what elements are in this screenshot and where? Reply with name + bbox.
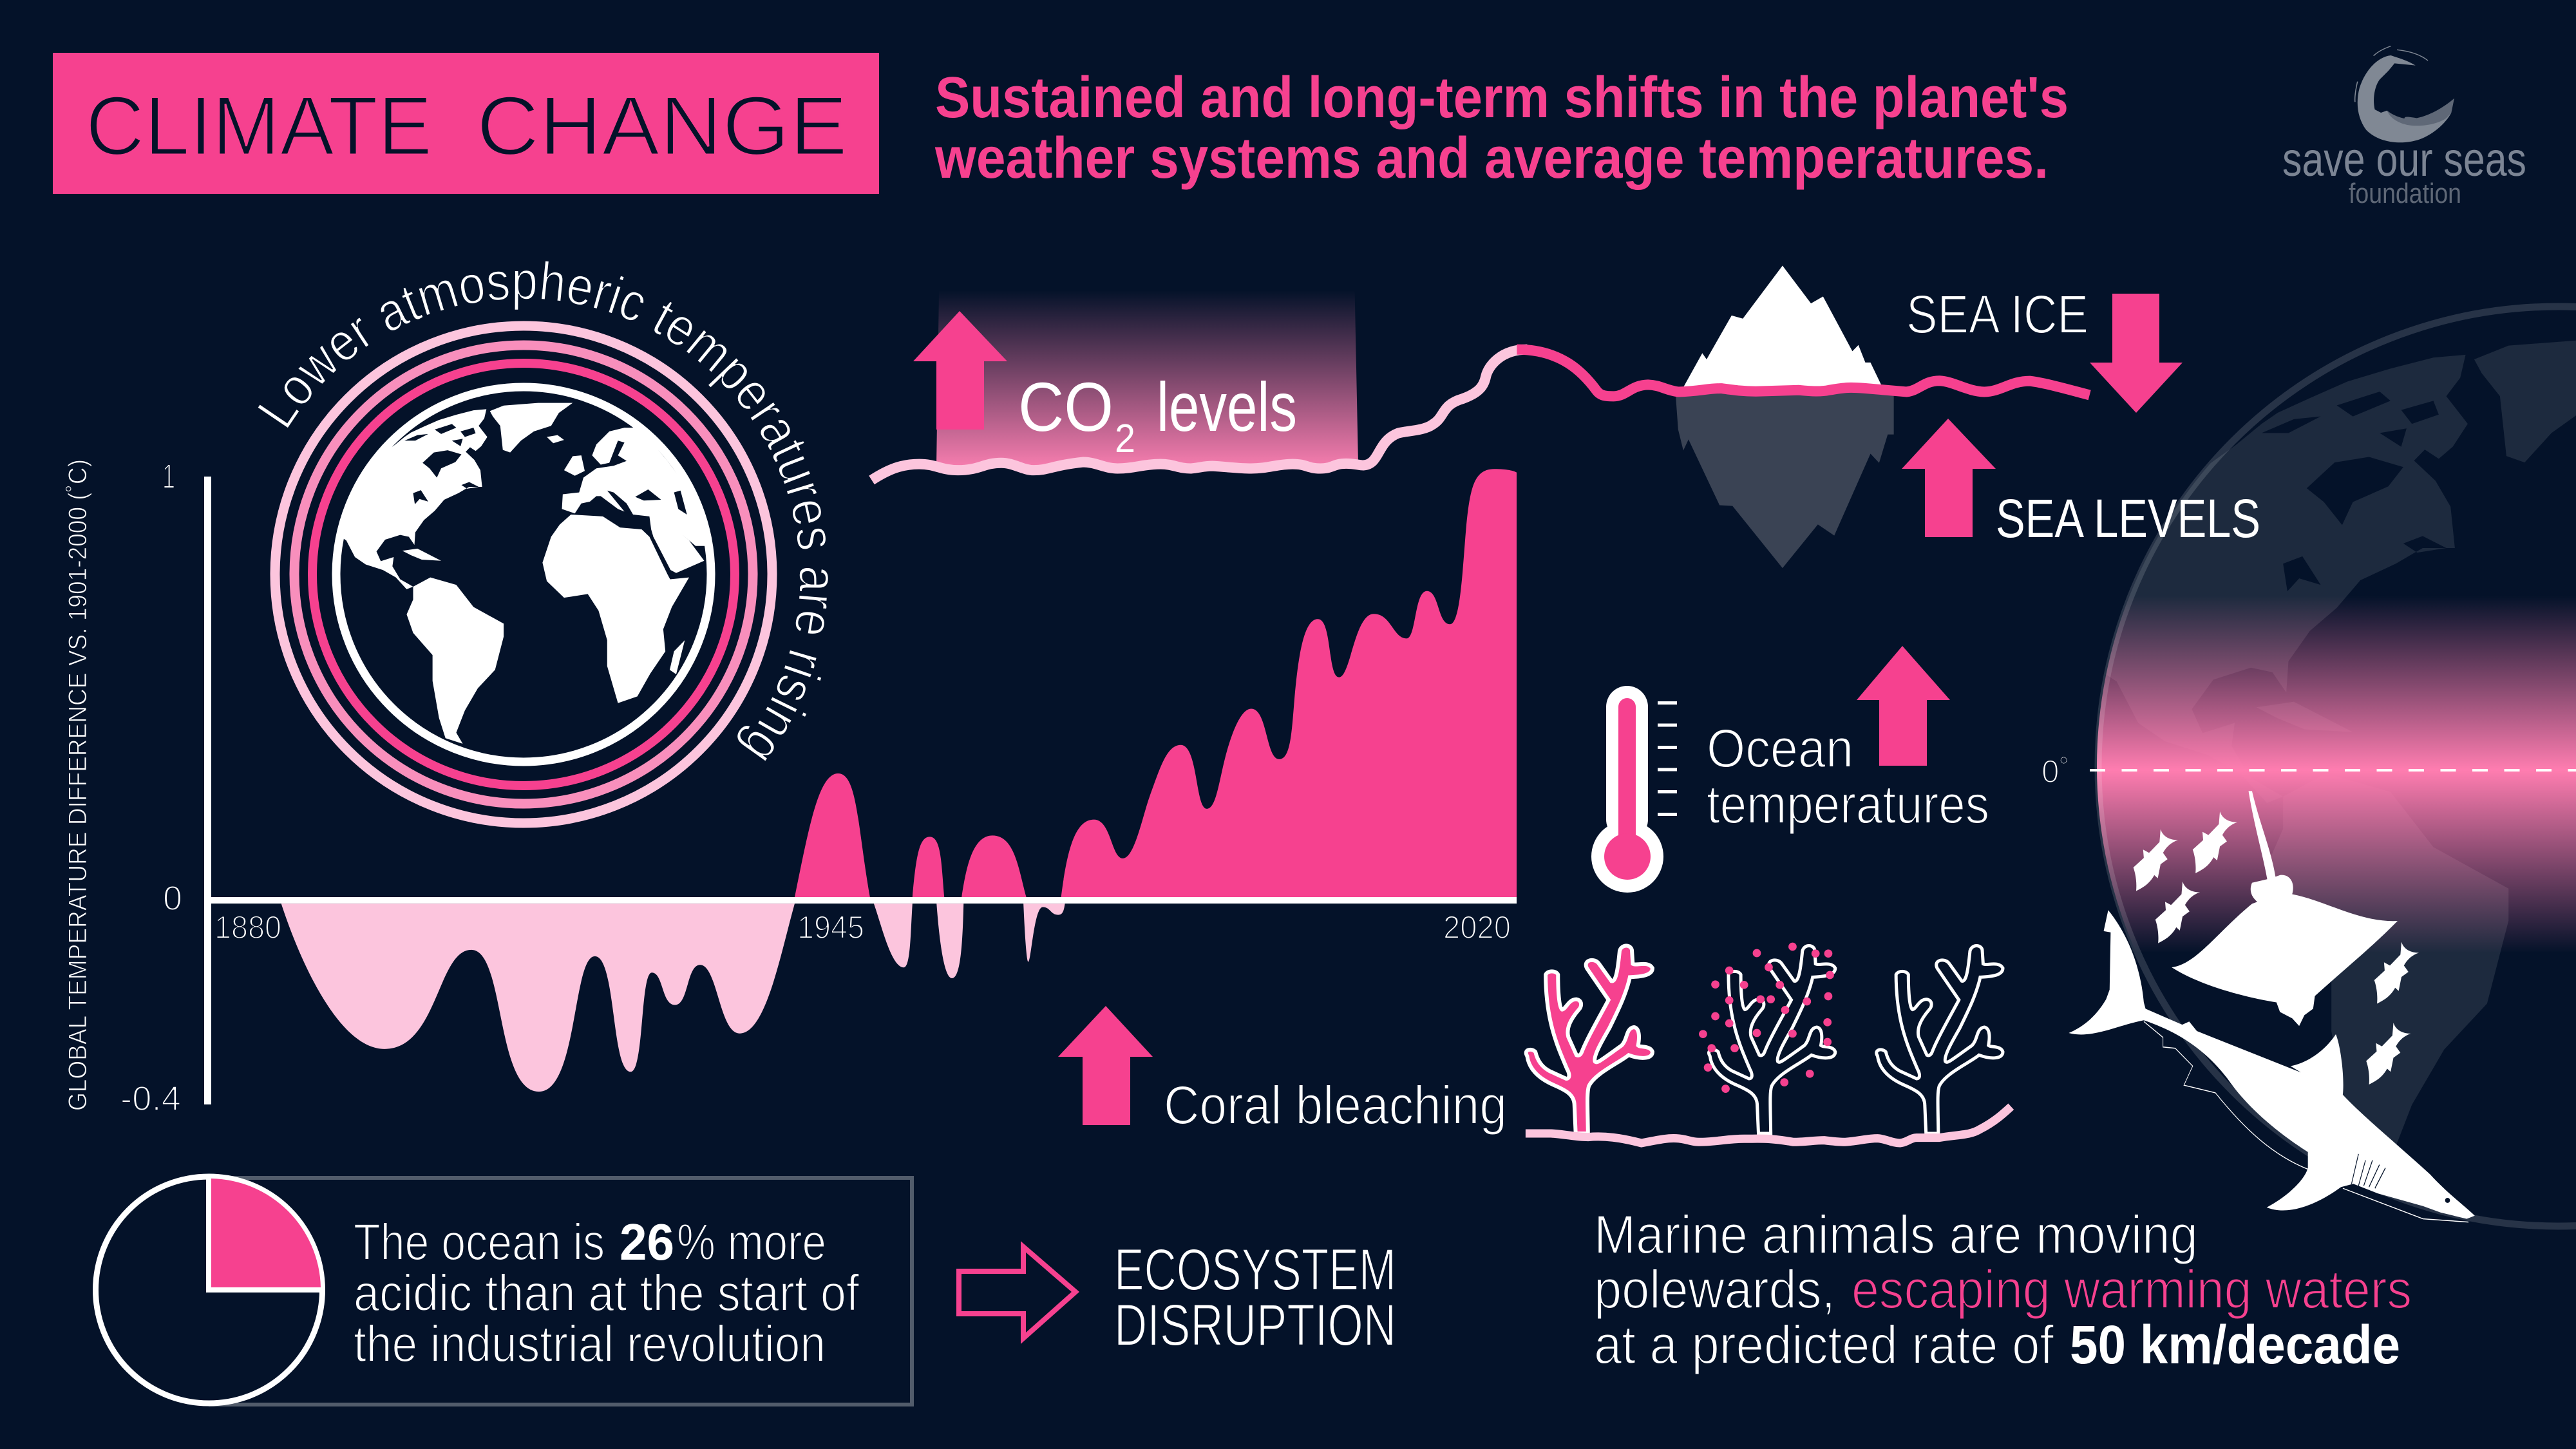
axis tick labels [120, 457, 182, 1118]
sea levels label: SEA LEVELS [1996, 488, 2260, 549]
ocean temperature up arrow [1857, 646, 1950, 766]
title box [53, 53, 879, 194]
marine animals text [1594, 1204, 2412, 1375]
CO2 label [1018, 368, 1297, 461]
sea ice down arrow [2090, 294, 2183, 413]
acidity text: the industrial revolution [354, 1315, 826, 1372]
coral bleaching up arrow [1058, 1006, 1153, 1125]
ecosystem disruption label: DISRUPTION [1114, 1293, 1396, 1358]
outline arrow [959, 1247, 1075, 1338]
logo: save our seas foundation: save our seas [2282, 133, 2526, 186]
sea levels up arrow [1902, 419, 1996, 537]
CO2 arrow [913, 311, 1007, 430]
pie chart [95, 1176, 322, 1403]
title box: CLIMATE [86, 79, 432, 173]
ocean temperatures label: temperatures [1707, 774, 1989, 835]
logo: save our seas foundation [2282, 46, 2526, 209]
eagle ray [2172, 791, 2398, 1026]
temperature chart [64, 457, 1517, 1118]
axes [204, 477, 211, 1104]
acidity panel [95, 1176, 912, 1405]
subtitle: Sustained and long-term shifts in the planet's [935, 66, 2069, 130]
ocean temperatures label [1707, 718, 1989, 835]
tuna school [2134, 811, 2419, 1084]
marine animals text: polewards, [1594, 1259, 1835, 1320]
coral: bleaching [1709, 946, 1835, 1133]
marine animals text: Marine animals are moving [1594, 1204, 2198, 1265]
coral: healthy [1526, 946, 1653, 1133]
globe with temperature rings [275, 326, 772, 823]
logo: save our seas foundation: foundation [2349, 178, 2461, 209]
curved text: Lower atmospheric temperatures are rising [258, 261, 828, 761]
ocean temperatures label: Ocean [1707, 718, 1853, 779]
wave line: pink part [1517, 350, 2090, 396]
equator dashed line [2090, 769, 2576, 772]
CO2 label: CO [1018, 368, 1113, 446]
big dim globe with equator glow [2087, 307, 2576, 1226]
acidity text: 26 [620, 1213, 674, 1271]
wave line: light part [872, 350, 1527, 480]
CO2 label: 2 [1115, 417, 1135, 461]
ring: mid pink [294, 345, 753, 804]
CO2 levels block [913, 290, 1363, 470]
CO2 label: levels [1157, 368, 1297, 446]
year labels: 2020 [1443, 909, 1511, 945]
sea ice label: SEA ICE [1906, 284, 2088, 345]
ring: white [336, 387, 711, 762]
marine animals [2069, 791, 2475, 1222]
coral bleaching label: Coral bleaching [1164, 1075, 1507, 1135]
axis tick labels: 1 [162, 457, 175, 496]
iceberg [1676, 266, 1894, 568]
acidity text [354, 1213, 860, 1372]
coral algae dots [1699, 943, 1834, 1093]
ecosystem disruption label [1114, 1237, 1396, 1358]
subtitle [934, 66, 2069, 191]
equator label: 0˚ [2041, 753, 2070, 790]
coral: bleached [1877, 946, 2003, 1133]
world map [341, 403, 708, 744]
marine animals text: 50 km/decade [2070, 1314, 2400, 1375]
axis tick labels: 0 [163, 879, 182, 918]
ecosystem disruption label: ECOSYSTEM [1114, 1237, 1396, 1303]
ring: outer light pink [275, 326, 772, 823]
title box: CHANGE [477, 79, 848, 173]
year labels: 1945 [797, 909, 864, 945]
CO2 gradient [936, 290, 1363, 470]
positive anomaly area [795, 469, 1517, 897]
marine animals text: escaping warming waters [1852, 1259, 2412, 1320]
mako shark [2069, 910, 2475, 1222]
y axis label: GLOBAL TEMPERATURE DIFFERENCE VS. 1901-2000 (˚C) [64, 459, 92, 1111]
negative anomaly area [281, 904, 1065, 1092]
sea floor line [1526, 1106, 2011, 1143]
panel frame [209, 1178, 912, 1405]
ring: hot pink [312, 363, 735, 786]
acidity text: The ocean is [354, 1213, 605, 1271]
acidity text: % more [677, 1213, 826, 1271]
marine animals text: at a predicted rate of [1594, 1314, 2054, 1375]
subtitle: weather systems and average temperatures. [934, 126, 2049, 191]
year labels [214, 909, 1511, 945]
year labels: 1880 [214, 909, 281, 945]
thermometer icon [1591, 686, 1677, 893]
coral illustrations [1526, 943, 2011, 1143]
acidity text: acidic than at the start of [354, 1264, 860, 1321]
axis tick labels: -0.4 [120, 1079, 181, 1118]
